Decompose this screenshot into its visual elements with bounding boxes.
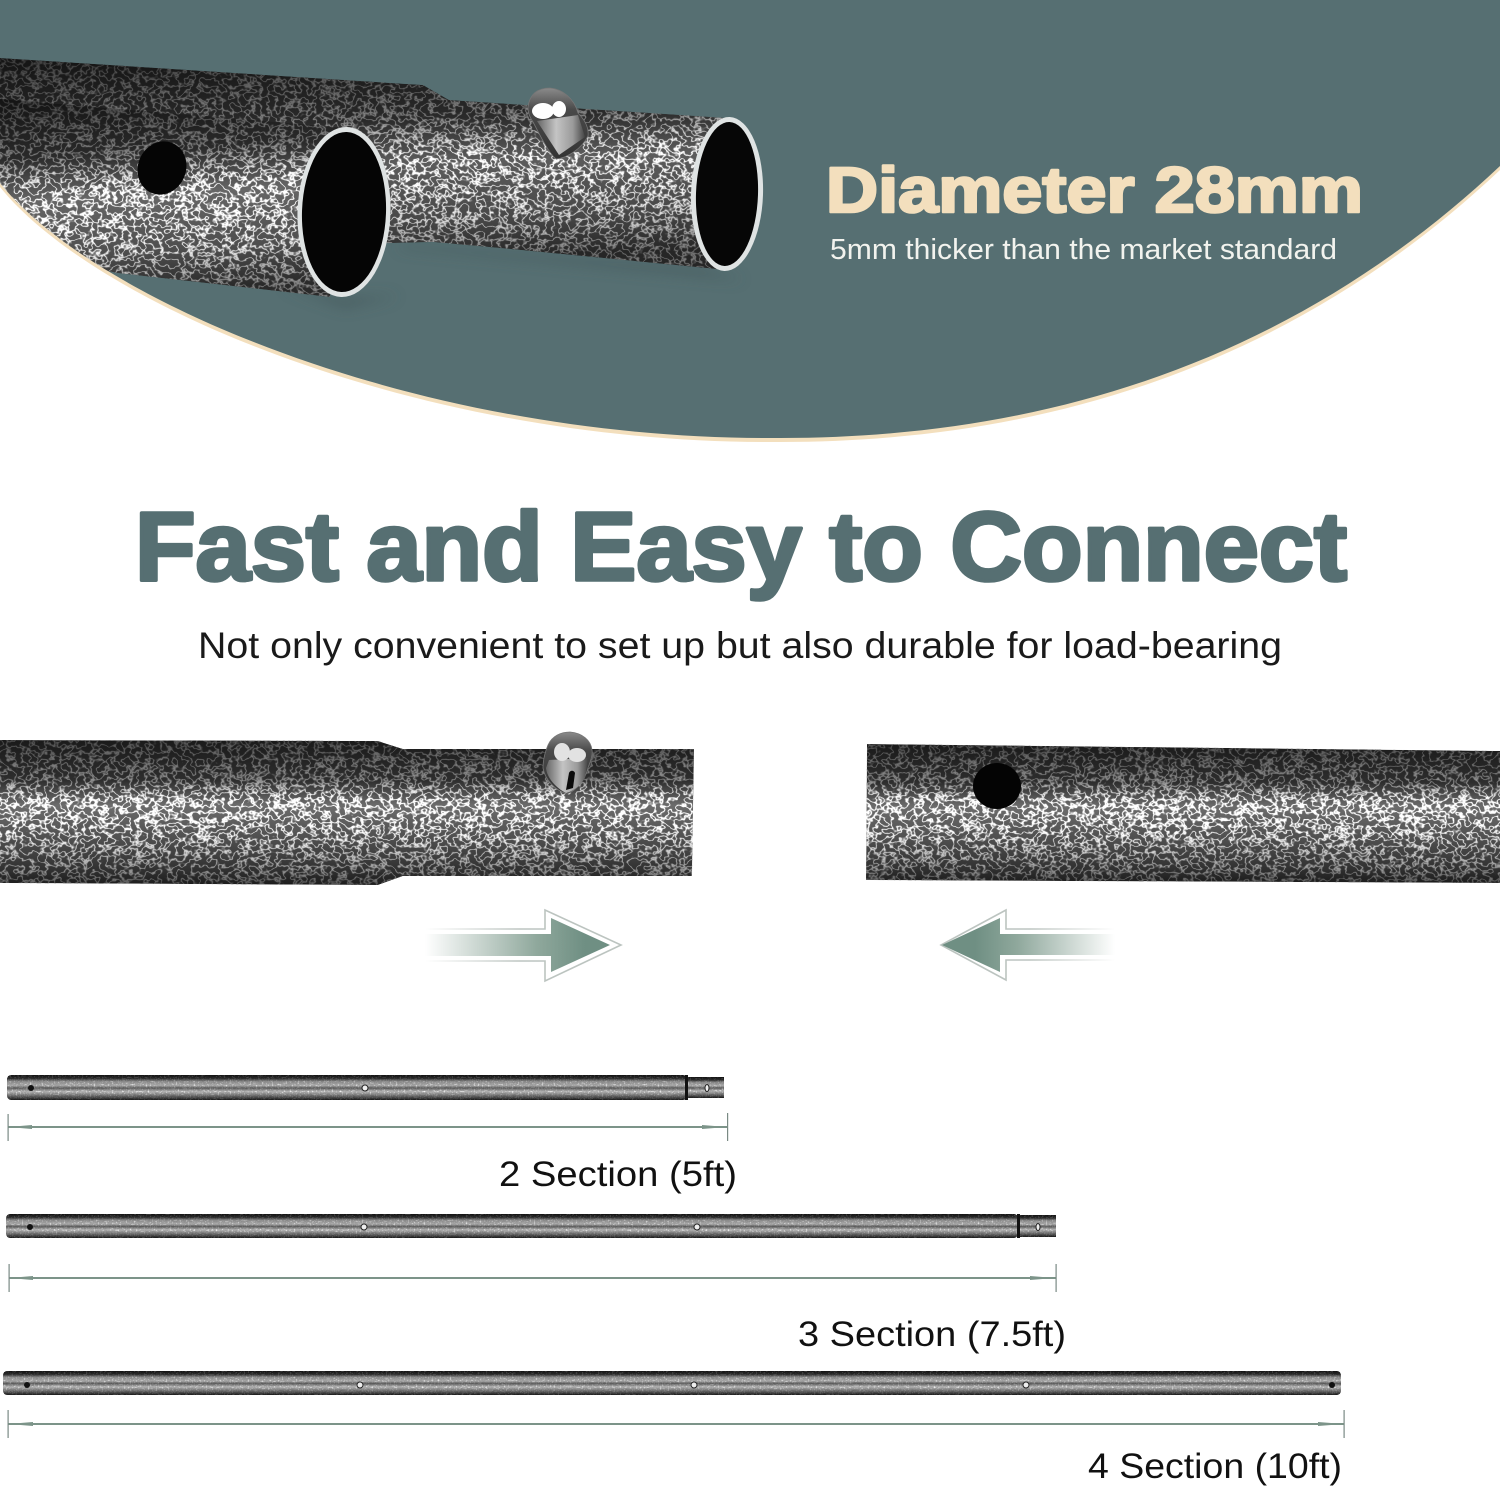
main title: Fast and Easy to Connect xyxy=(135,492,1347,601)
back pole with spring pin xyxy=(0,58,766,272)
rod: 4 section xyxy=(3,1371,1341,1395)
dimension line: 4 section xyxy=(8,1410,1345,1438)
heading: diameter: Diameter 28mm xyxy=(826,154,1363,226)
right pole with hole xyxy=(866,744,1500,883)
label: 2 section: 2 Section (5ft) xyxy=(499,1155,737,1194)
rod: 2 section xyxy=(7,1075,724,1100)
pole shadow on panel xyxy=(280,244,745,308)
subheading: thickness note: 5mm thicker than the market standard xyxy=(830,234,1337,266)
front pole with hole xyxy=(0,99,393,299)
arrow: pointing left xyxy=(941,910,1115,980)
dimension line: 3 section xyxy=(8,1264,1057,1292)
dimension line: 2 section xyxy=(8,1113,728,1141)
teal header panel xyxy=(0,0,1500,442)
label: 4 section: 4 Section (10ft) xyxy=(1088,1447,1342,1486)
arrow: pointing right xyxy=(425,910,621,981)
rod: 3 section xyxy=(6,1214,1056,1238)
subtitle: Not only convenient to set up but also durable for load-bearing xyxy=(198,625,1282,666)
left pole with spring pin xyxy=(0,732,694,885)
label: 3 section: 3 Section (7.5ft) xyxy=(798,1315,1066,1354)
photo: two connecting pole ends xyxy=(0,58,766,308)
